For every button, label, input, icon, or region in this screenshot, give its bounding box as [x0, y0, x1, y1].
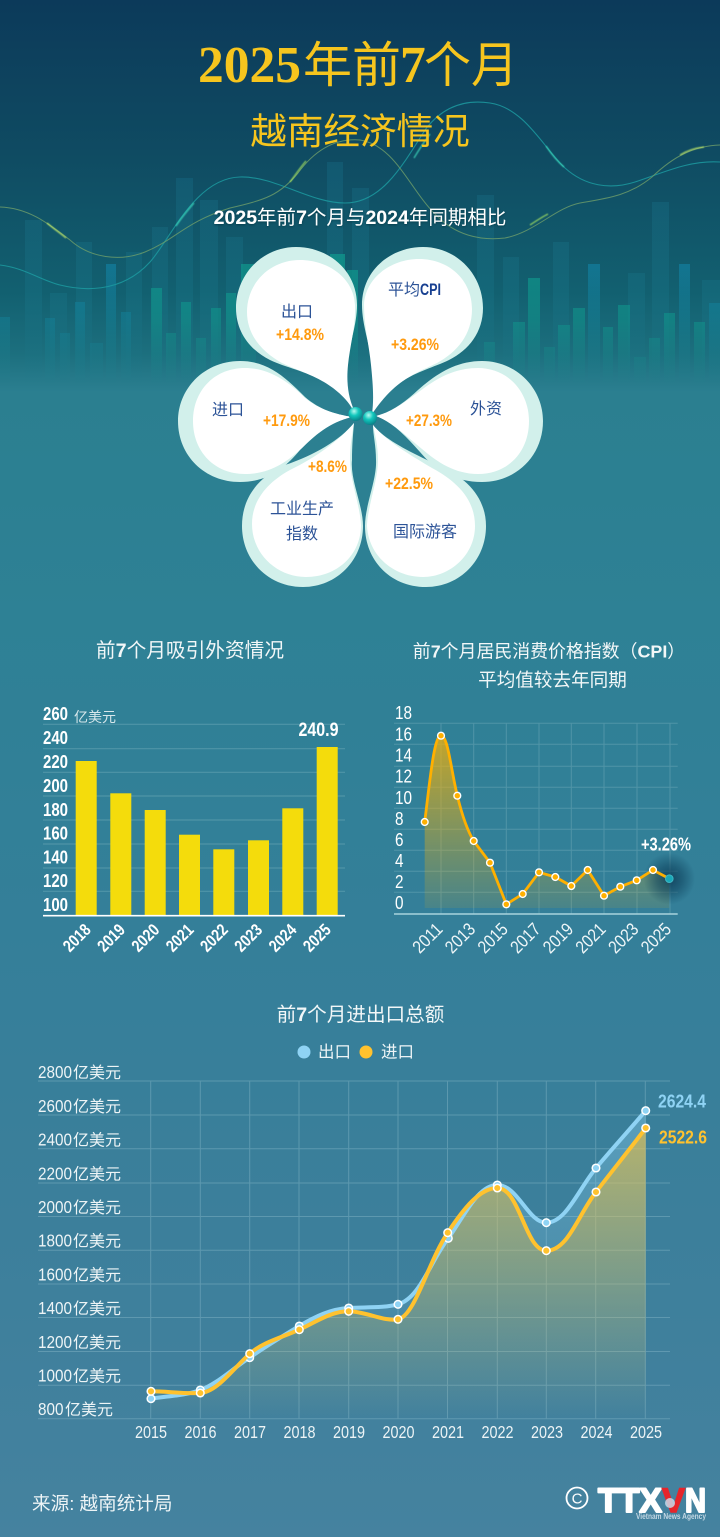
petal: imports: +17.9%: [263, 411, 310, 430]
y axis labels: 1800: [38, 1230, 72, 1250]
petal: exports: [236, 247, 357, 412]
x axis labels: [59, 920, 335, 956]
y axis labels: 亿美元: [73, 1232, 121, 1250]
y axis labels: 2800: [38, 1062, 72, 1082]
y axis labels: 亿美元: [73, 1098, 121, 1116]
y axis labels: 2200: [38, 1164, 72, 1184]
CPI x axis labels: 2011: [408, 919, 447, 957]
petal: average CPI: CPI: [420, 281, 441, 299]
CPI y axis labels: 8: [395, 808, 404, 829]
y axis labels: [38, 1062, 121, 1419]
CPI x axis labels: 2017: [506, 919, 544, 957]
x axis labels: 2024: [580, 1422, 613, 1442]
CPI y axis labels: 12: [395, 766, 412, 786]
petal: international visitors: +22.5%: [385, 474, 433, 493]
x axis labels: 2024: [265, 920, 301, 956]
x axis labels: 2017: [234, 1422, 266, 1442]
copyright symbol: [566, 1488, 588, 1508]
x axis labels: 2016: [184, 1422, 216, 1442]
heading: foreign investment chart: 前7个月吸引外资情况: [96, 640, 284, 662]
y axis labels: 160: [43, 824, 68, 844]
heading: CPI chart: 平均值较去年同期: [478, 670, 627, 690]
y axis labels: 2600: [38, 1096, 72, 1116]
value label: exports 2025: 2624.4: [658, 1090, 707, 1112]
background bars: tall back layer: [25, 162, 720, 395]
import area: [151, 1128, 646, 1419]
CPI x axis labels: 2021: [572, 919, 610, 957]
CPI x axis labels: 2013: [441, 919, 479, 957]
logo: TTXVN: [598, 1482, 706, 1521]
copyright symbol: C: [572, 1490, 583, 1508]
petal: industrial production index: 工业生产: [270, 500, 334, 518]
y axis labels: 1600: [38, 1264, 72, 1284]
y axis labels: 140: [43, 848, 68, 868]
CPI x axis labels: 2015: [474, 919, 512, 957]
petal: imports: [178, 361, 352, 482]
export line: [151, 1111, 646, 1399]
legend: [298, 1042, 414, 1062]
logo: TTXVN: N: [685, 1482, 706, 1520]
background bars: front teal layer: [151, 254, 705, 395]
CPI y axis labels: 16: [395, 724, 412, 744]
CPI points: [421, 732, 656, 908]
x axis labels: 2022: [482, 1422, 514, 1442]
CPI y axis labels: 4: [395, 850, 404, 871]
x axis labels: 2020: [382, 1422, 415, 1442]
petal: international visitors: 国际游客: [393, 523, 457, 541]
x axis labels: 2019: [94, 920, 129, 956]
title: 2025: [198, 37, 301, 94]
petal: industrial production index: 指数: [286, 525, 318, 543]
petal: foreign investment: [376, 361, 543, 482]
petal: average CPI: [362, 247, 483, 414]
y axis labels: 亿美元: [73, 1300, 121, 1318]
logo: TTXVN: V: [662, 1482, 685, 1520]
x axis labels: 2021: [432, 1422, 464, 1442]
import points: [147, 1124, 649, 1397]
decorative waves: [0, 102, 720, 289]
petal: international visitors: [365, 425, 486, 587]
petal: industrial production index: +8.6%: [308, 457, 347, 476]
CPI area: [425, 736, 669, 908]
y axis labels: 2000: [38, 1197, 72, 1217]
petal: foreign investment: +27.3%: [406, 411, 452, 430]
x axis labels: 2025: [630, 1422, 662, 1442]
CPI y axis labels: 18: [395, 702, 412, 723]
line chart: import and export totals: [38, 1062, 707, 1442]
y axis labels: 100: [43, 895, 68, 915]
y axis labels: [43, 704, 68, 915]
logo: TTXVN: Vietnam News Agency: [636, 1512, 706, 1521]
y axis labels: 240: [43, 728, 68, 748]
unit label: 亿美元: [74, 709, 116, 725]
x axis labels: 2021: [162, 920, 198, 956]
CPI x axis labels: 2025: [637, 919, 675, 957]
title: 个月: [424, 39, 518, 93]
y axis labels: 1000: [38, 1366, 72, 1386]
x axis labels: 2025: [299, 920, 335, 956]
x axis labels: 2015: [135, 1422, 167, 1442]
value label 2025: 240.9: [298, 719, 339, 741]
CPI x axis labels: [408, 919, 675, 957]
x axis labels: 2019: [333, 1422, 365, 1442]
title: 7: [400, 37, 426, 94]
title: [198, 37, 518, 94]
x axis labels: [135, 1422, 662, 1442]
flower chart: six petals: [178, 247, 543, 587]
bar chart: foreign investment: [43, 704, 345, 956]
y axis labels: 亿美元: [73, 1064, 121, 1082]
heading: comparison with same period of 2024: 2025年前7个月与2024年同期相比: [214, 207, 506, 229]
CPI y axis labels: 2: [395, 871, 404, 892]
CPI y axis labels: [395, 702, 412, 913]
CPI x axis labels: 2023: [604, 919, 642, 957]
y axis labels: 800: [38, 1399, 64, 1419]
petal: exports: 出口: [281, 303, 313, 321]
export area: [151, 1111, 646, 1419]
y axis labels: 亿美元: [65, 1401, 113, 1419]
title: 年前: [303, 39, 401, 93]
petal: foreign investment: 外资: [470, 400, 502, 418]
y axis labels: 1200: [38, 1332, 72, 1352]
CPI y axis labels: 0: [395, 892, 404, 913]
heading: CPI chart: [413, 642, 685, 690]
y axis labels: 200: [43, 776, 68, 796]
y axis labels: 220: [43, 752, 68, 772]
x axis labels: 2018: [59, 920, 95, 956]
CPI line: [425, 736, 669, 904]
y axis labels: 1400: [38, 1298, 72, 1318]
y axis labels: 2400: [38, 1130, 72, 1150]
logo: TTXVN: TTX: [598, 1482, 662, 1520]
background bars: front blue layer: [0, 264, 720, 395]
petal: industrial production index: [242, 423, 363, 587]
y axis labels: 亿美元: [73, 1199, 121, 1217]
y axis labels: 亿美元: [73, 1166, 121, 1184]
x axis labels: 2023: [231, 920, 266, 956]
petal: imports: 进口: [212, 401, 244, 419]
x axis labels: 2023: [531, 1422, 563, 1442]
CPI y axis labels: 14: [395, 744, 412, 766]
yellow bars: [76, 747, 338, 916]
import line: [151, 1128, 646, 1393]
CPI y axis labels: 6: [395, 829, 404, 850]
y axis labels: 亿美元: [73, 1132, 121, 1150]
y axis labels: 亿美元: [73, 1334, 121, 1352]
petal: exports: +14.8%: [276, 325, 324, 344]
CPI x axis labels: 2019: [539, 919, 577, 957]
source: 来源: 越南统计局: [32, 1493, 172, 1514]
y axis labels: 180: [43, 800, 68, 820]
legend: 出口: [318, 1042, 351, 1062]
flower centre beads: [348, 407, 377, 425]
x axis labels: 2018: [284, 1422, 316, 1442]
subtitle: 越南经济情况: [250, 111, 470, 152]
x axis labels: 2020: [128, 920, 163, 956]
heading: CPI chart: 前7个月居民消费价格指数（CPI）: [413, 642, 685, 662]
petal: average CPI: 平均: [388, 281, 420, 299]
y axis labels: 亿美元: [73, 1266, 121, 1284]
x axis labels: 2022: [197, 920, 232, 956]
export points: [147, 1107, 649, 1402]
y axis labels: 260: [43, 704, 68, 724]
legend: 进口: [381, 1042, 414, 1062]
highlight glow for 2025: [643, 853, 695, 905]
y axis labels: 亿美元: [73, 1368, 121, 1386]
line chart: CPI: [394, 702, 695, 957]
CPI y axis labels: 10: [395, 787, 412, 808]
heading: trade chart: 前7个月进出口总额: [277, 1004, 445, 1026]
y axis labels: 120: [43, 871, 68, 891]
value label 2025: +3.26%: [641, 834, 691, 854]
petal: average CPI: +3.26%: [391, 335, 439, 354]
value label: imports 2025: 2522.6: [659, 1126, 707, 1148]
